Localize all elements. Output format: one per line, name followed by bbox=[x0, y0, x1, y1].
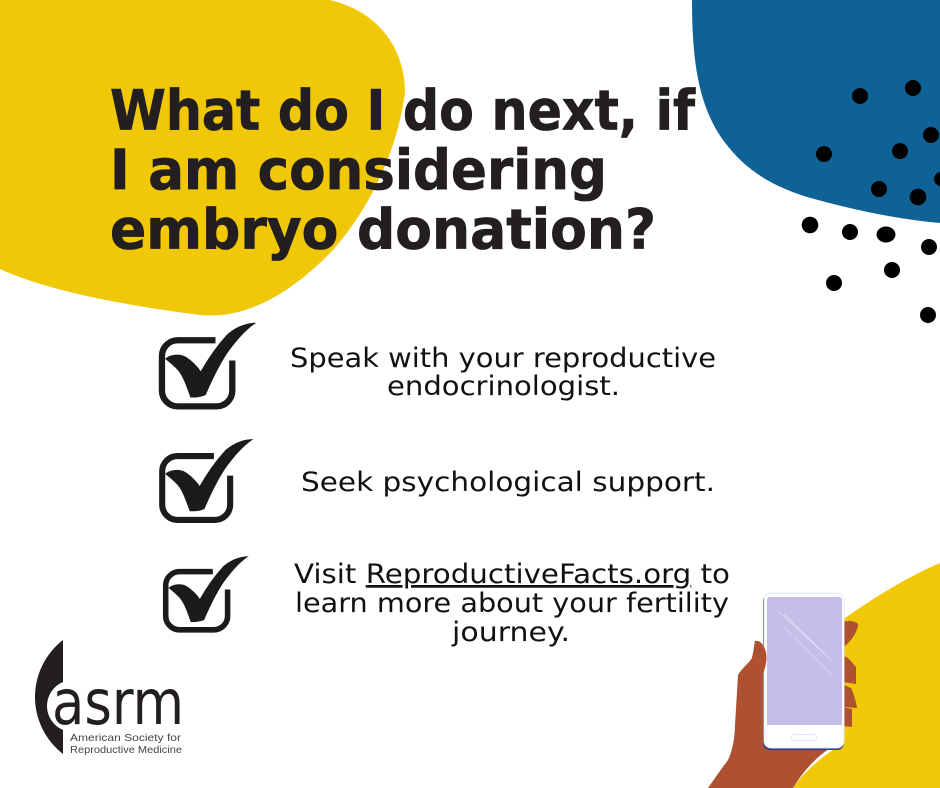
checkbox icon 3 bbox=[166, 557, 246, 630]
ASRM logo: American Society for bbox=[70, 732, 182, 744]
step 1 text bbox=[290, 343, 716, 402]
dot cluster bbox=[802, 80, 940, 323]
step 3 text: learn more about your fertility bbox=[295, 588, 729, 619]
ASRM logo: asrm bbox=[52, 666, 184, 739]
hand holding phone bbox=[708, 593, 858, 788]
step 3 text bbox=[294, 559, 730, 648]
title: embryo donation? bbox=[110, 198, 656, 262]
home button bbox=[792, 734, 816, 740]
fingers bbox=[842, 621, 858, 727]
step 1 text: endocrinologist. bbox=[387, 371, 620, 402]
phone bbox=[763, 593, 844, 750]
checkbox icon 2 bbox=[162, 440, 250, 520]
ASRM logo bbox=[35, 640, 184, 756]
title: I am considering bbox=[110, 138, 607, 202]
title: What do I do next, if bbox=[110, 78, 696, 142]
blue blob top right bbox=[692, 0, 940, 223]
step 3 text: Visit ReproductiveFacts.org to bbox=[294, 559, 730, 590]
ASRM logo: Reproductive Medicine bbox=[70, 744, 182, 756]
step 1 text: Speak with your reproductive bbox=[290, 343, 716, 374]
screen bbox=[767, 597, 842, 725]
step 3 text: journey. bbox=[451, 617, 570, 648]
yellow blob top left bbox=[0, 0, 405, 316]
hand bbox=[708, 641, 835, 788]
thumb bbox=[752, 641, 767, 687]
checkbox icon 1 bbox=[162, 324, 253, 406]
step 2 text: Seek psychological support. bbox=[301, 467, 715, 498]
yellow blob bottom right bbox=[793, 563, 940, 788]
title bbox=[110, 78, 696, 262]
